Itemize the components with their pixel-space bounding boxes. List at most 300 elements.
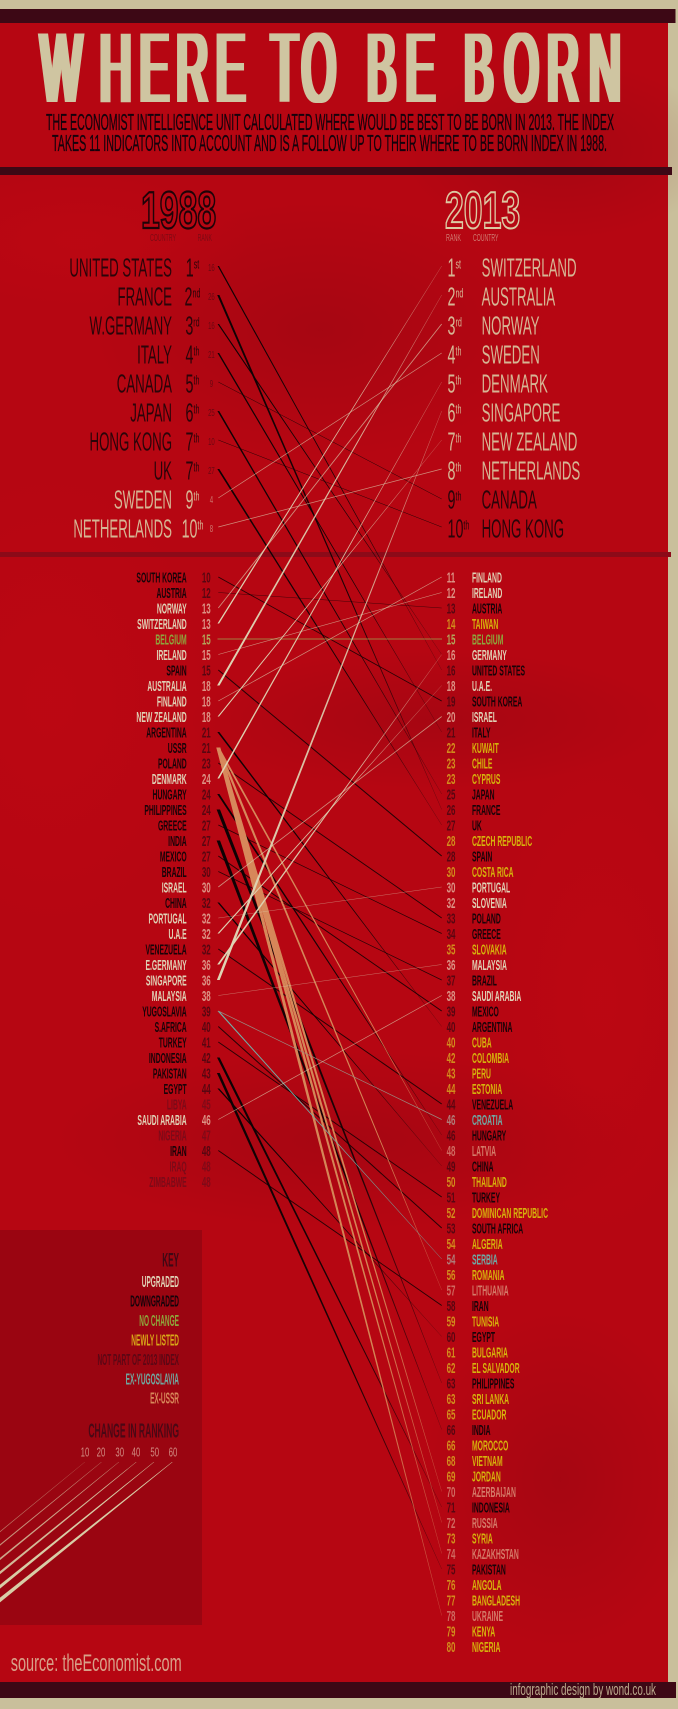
2013 lower list countries: SYRIA xyxy=(472,1532,493,1548)
2013 lower list ranks: 35 xyxy=(447,942,456,958)
2013 lower list ranks: 68 xyxy=(447,1454,456,1470)
2013 lower list countries: COSTA RICA xyxy=(472,866,514,881)
2013 lower list countries: ITALY xyxy=(472,726,491,742)
footer bar xyxy=(0,1680,676,1699)
2013 lower list countries: TUNISIA xyxy=(472,1315,499,1331)
2013 lower list countries: INDONESIA xyxy=(472,1501,510,1517)
1988 lower list ranks xyxy=(202,570,211,1191)
2013 top ten ranks: th xyxy=(455,462,462,475)
2013 lower list countries: AZERBAIJAN xyxy=(472,1486,516,1501)
slope lines: downgraded (black) xyxy=(217,266,442,1569)
1988 lower list countries: U.A.E xyxy=(169,928,187,943)
2013 lower list countries: FRANCE xyxy=(472,804,501,819)
1988 lower list ranks: 42 xyxy=(202,1051,211,1067)
1988 lower list countries: PAKISTAN xyxy=(153,1067,187,1083)
1988 lower list countries: YUGOSLAVIA xyxy=(142,1005,187,1021)
1988 top ten 2013 positions: 9 xyxy=(210,379,213,389)
2013 lower list ranks: 70 xyxy=(447,1485,456,1501)
2013 lower list countries: POLAND xyxy=(472,912,501,928)
1988 top ten countries: ITALY xyxy=(137,341,172,370)
2013 top ten countries: SWEDEN xyxy=(482,341,540,370)
1988 top ten ranks: 9 xyxy=(186,486,193,515)
2013 lower list countries: FINLAND xyxy=(472,571,502,587)
2013 lower list ranks: 21 xyxy=(447,725,456,741)
1988 lower list countries: SAUDI ARABIA xyxy=(137,1114,187,1129)
2013 lower list countries: CUBA xyxy=(472,1036,492,1052)
1988 lower list countries: ISRAEL xyxy=(162,881,187,897)
1988 top ten ranks: 7 xyxy=(186,428,193,457)
2013 top ten countries: SWITZERLAND xyxy=(482,254,577,283)
2013 lower list countries: KAZAKHSTAN xyxy=(472,1548,519,1563)
2013 lower list ranks: 37 xyxy=(447,973,455,989)
2013 lower list countries: SOUTH AFRICA xyxy=(472,1222,523,1238)
2013 lower list ranks: 28 xyxy=(447,834,456,850)
slope lines: upgraded (cream) xyxy=(217,266,442,1120)
2013 top ten countries: NETHERLANDS xyxy=(482,457,580,486)
2013 lower list countries: TURKEY xyxy=(472,1191,500,1207)
2013 lower list countries: LITHUANIA xyxy=(472,1284,509,1300)
1988 lower list ranks: 15 xyxy=(202,663,211,679)
1988 lower list countries: POLAND xyxy=(158,757,187,773)
2013 lower list countries: CZECH REPUBLIC xyxy=(472,835,532,850)
2013 lower list ranks: 11 xyxy=(447,570,456,586)
2013 lower list countries: BANGLADESH xyxy=(472,1594,520,1610)
change scale numbers: 30 xyxy=(115,1446,124,1460)
1988 top ten countries xyxy=(69,254,172,544)
1988 lower list ranks: 30 xyxy=(202,865,211,881)
2013 lower list ranks: 27 xyxy=(447,818,455,834)
2013 lower list ranks: 42 xyxy=(447,1051,456,1067)
2013 lower list ranks: 19 xyxy=(447,694,456,710)
2013 top ten countries: HONG KONG xyxy=(482,515,564,544)
2013 lower list ranks: 53 xyxy=(447,1221,456,1237)
1988 lower list ranks: 46 xyxy=(202,1113,211,1129)
1988 top ten 2013 positions xyxy=(208,263,215,534)
top bar xyxy=(0,9,676,23)
1988 top ten 2013 positions: 25 xyxy=(208,408,215,418)
1988 lower list ranks: 32 xyxy=(202,942,211,958)
2013 top ten countries: SINGAPORE xyxy=(482,399,560,428)
1988 lower list countries: VENEZUELA xyxy=(145,943,187,959)
1988 top ten ranks: th xyxy=(193,491,200,504)
2013 lower list ranks: 33 xyxy=(447,911,456,927)
1988 top ten countries: W.GERMANY xyxy=(90,312,172,341)
key entries: UPGRADED xyxy=(142,1273,179,1291)
change scale numbers: 20 xyxy=(97,1446,105,1460)
1988 top ten ranks: 7 xyxy=(186,457,193,486)
2013 top ten ranks: 3 xyxy=(448,312,455,340)
2013 lower list ranks: 54 xyxy=(447,1252,456,1268)
2013 lower list ranks: 40 xyxy=(447,1035,456,1051)
1988 lower list countries: SOUTH KOREA xyxy=(136,571,187,587)
2013 lower list countries: MALAYSIA xyxy=(472,959,507,974)
2013 lower list countries: SAUDI ARABIA xyxy=(472,990,521,1005)
2013 lower list ranks xyxy=(447,570,456,1656)
1988 lower list ranks: 21 xyxy=(202,725,211,741)
change scale numbers xyxy=(81,1446,177,1460)
2013 lower list countries: GREECE xyxy=(472,928,501,943)
1988 top ten ranks: 4 xyxy=(186,341,193,369)
change in ranking heading: CHANGE IN RANKING xyxy=(88,1421,179,1443)
column labels 1988: RANK xyxy=(198,233,212,244)
2013 lower list countries: SRI LANKA xyxy=(472,1393,509,1408)
2013 top ten ranks: nd xyxy=(455,287,464,301)
2013 top ten ranks: 4 xyxy=(448,341,455,369)
2013 lower list countries: ARGENTINA xyxy=(472,1021,512,1036)
2013 lower list ranks: 36 xyxy=(447,958,456,974)
2013 lower list countries: UKRAINE xyxy=(472,1610,503,1625)
2013 lower list countries: ISRAEL xyxy=(472,711,497,726)
1988 top ten 2013 positions: 21 xyxy=(208,350,215,360)
1988 lower list countries: BRAZIL xyxy=(162,866,187,881)
1988 lower list ranks: 40 xyxy=(202,1020,211,1036)
2013 top ten ranks: 7 xyxy=(448,428,455,457)
2013 lower list ranks: 77 xyxy=(447,1593,455,1609)
2013 lower list ranks: 75 xyxy=(447,1562,456,1578)
1988 lower list countries: E.GERMANY xyxy=(145,959,187,974)
key entries xyxy=(97,1273,179,1407)
1988 top ten ranks: 10 xyxy=(182,515,197,544)
1988 top ten 2013 positions: 8 xyxy=(210,524,213,534)
1988 lower list countries: INDIA xyxy=(168,835,187,850)
2013 lower list countries: LATVIA xyxy=(472,1145,496,1160)
2013 lower list ranks: 16 xyxy=(447,663,456,679)
1988 top ten ranks: 2 xyxy=(185,283,192,311)
key entries: EX-USSR xyxy=(150,1389,179,1407)
1988 top ten 2013 positions: 16 xyxy=(208,321,215,331)
1988 lower list ranks: 48 xyxy=(202,1144,211,1160)
2013 lower list countries: EL SALVADOR xyxy=(472,1362,520,1377)
1988 lower list countries: INDONESIA xyxy=(149,1052,187,1067)
column labels 2013: RANK xyxy=(446,233,461,244)
1988 lower list ranks: 18 xyxy=(202,679,211,695)
2013 lower list ranks: 13 xyxy=(447,601,456,617)
1988 lower list countries: LIBYA xyxy=(167,1098,187,1114)
year heading 1988: 1988 xyxy=(141,182,216,240)
2013 lower list ranks: 76 xyxy=(447,1578,456,1594)
key entries: DOWNGRADED xyxy=(130,1292,179,1310)
1988 top ten ranks: th xyxy=(197,520,204,533)
2013 lower list countries: IRELAND xyxy=(472,587,502,602)
2013 lower list countries: PERU xyxy=(472,1067,491,1083)
1988 lower list countries: SINGAPORE xyxy=(146,974,187,990)
2013 top ten ranks: 2 xyxy=(448,283,455,311)
2013 lower list ranks: 15 xyxy=(447,632,456,648)
2013 lower list ranks: 65 xyxy=(447,1407,456,1423)
1988 top ten 2013 positions: 16 xyxy=(208,263,215,273)
1988 lower list ranks: 13 xyxy=(202,601,211,617)
2013 lower list countries: COLOMBIA xyxy=(472,1052,509,1067)
1988 lower list ranks: 47 xyxy=(202,1128,211,1144)
2013 lower list countries: DOMINICAN REPUBLIC xyxy=(472,1207,548,1222)
1988 lower list countries xyxy=(136,571,187,1191)
year heading 2013: 2013 xyxy=(445,182,520,240)
1988 lower list countries: PORTUGAL xyxy=(149,912,187,928)
1988 lower list countries: ARGENTINA xyxy=(146,726,187,742)
2013 lower list countries: SERBIA xyxy=(472,1253,498,1269)
2013 lower list countries: CHINA xyxy=(472,1160,494,1176)
2013 lower list ranks: 78 xyxy=(447,1609,456,1625)
1988 lower list countries: AUSTRIA xyxy=(156,587,187,602)
2013 lower list ranks: 66 xyxy=(447,1423,456,1439)
1988 top ten ranks: 5 xyxy=(186,370,193,398)
1988 lower list ranks: 43 xyxy=(202,1066,211,1082)
2013 lower list ranks: 46 xyxy=(447,1113,456,1129)
2013 lower list ranks: 32 xyxy=(447,896,456,912)
slope lines: ex-USSR (orange) xyxy=(216,748,442,1616)
1988 lower list ranks: 21 xyxy=(202,741,211,757)
1988 lower list countries: S.AFRICA xyxy=(155,1021,187,1036)
1988 lower list countries: SPAIN xyxy=(166,664,187,680)
2013 lower list ranks: 73 xyxy=(447,1531,456,1547)
1988 lower list ranks: 44 xyxy=(202,1082,211,1098)
1988 lower list countries: MEXICO xyxy=(160,850,187,866)
key entries: NOT PART OF 2013 INDEX xyxy=(97,1351,179,1369)
2013 top ten ranks: th xyxy=(455,433,462,446)
1988 top ten ranks xyxy=(182,254,204,544)
1988 lower list ranks: 10 xyxy=(202,570,211,586)
2013 lower list countries: JORDAN xyxy=(472,1470,501,1486)
1988 lower list ranks: 27 xyxy=(202,834,211,850)
1988 lower list ranks: 32 xyxy=(202,896,211,912)
2013 lower list countries: UNITED STATES xyxy=(472,664,525,680)
2013 lower list ranks: 16 xyxy=(447,648,456,664)
key entries: EX-YUGOSLAVIA xyxy=(126,1370,179,1388)
2013 lower list ranks: 43 xyxy=(447,1066,456,1082)
2013 lower list ranks: 39 xyxy=(447,1004,456,1020)
2013 top ten ranks: 9 xyxy=(448,486,455,515)
column labels 2013: COUNTRY xyxy=(473,233,499,244)
1988 lower list ranks: 13 xyxy=(202,617,211,633)
2013 lower list countries: CHILE xyxy=(472,757,493,773)
1988 top ten ranks: 6 xyxy=(186,399,193,427)
2013 lower list ranks: 46 xyxy=(447,1128,456,1144)
change scale numbers: 40 xyxy=(132,1446,140,1460)
title: WHERE TO BE BORN xyxy=(41,14,621,124)
1988 lower list countries: USSR xyxy=(168,742,187,757)
2013 top ten ranks: 1 xyxy=(448,254,455,282)
1988 lower list ranks: 48 xyxy=(202,1175,211,1191)
2013 top ten ranks xyxy=(448,254,469,544)
1988 lower list countries: HUNGARY xyxy=(153,788,187,804)
2013 lower list countries: VENEZUELA xyxy=(472,1098,513,1114)
2013 top ten ranks: 8 xyxy=(448,457,455,486)
1988 lower list ranks: 15 xyxy=(202,632,211,648)
2013 lower list ranks: 63 xyxy=(447,1376,456,1392)
1988 lower list countries: EGYPT xyxy=(164,1083,187,1098)
2013 top ten countries xyxy=(482,254,580,544)
slope line: no change (green) xyxy=(218,638,442,640)
1988 top ten 2013 positions: 26 xyxy=(208,292,215,302)
2013 lower list countries: PORTUGAL xyxy=(472,881,510,897)
1988 top ten countries: SWEDEN xyxy=(114,486,172,515)
1988 lower list countries: MALAYSIA xyxy=(152,990,187,1005)
2013 lower list ranks: 18 xyxy=(447,679,456,695)
key entries: NO CHANGE xyxy=(139,1312,179,1330)
intro text xyxy=(46,109,614,156)
2013 lower list ranks: 12 xyxy=(447,586,456,602)
1988 top ten countries: NETHERLANDS xyxy=(73,515,172,544)
2013 lower list countries: IRAN xyxy=(472,1300,489,1315)
2013 lower list ranks: 74 xyxy=(447,1547,456,1563)
2013 top ten ranks: 10 xyxy=(448,515,463,544)
1988 lower list countries: GREECE xyxy=(158,819,187,835)
1988 top ten ranks: th xyxy=(193,374,200,388)
change scale numbers: 10 xyxy=(81,1446,89,1460)
2013 top ten countries: NORWAY xyxy=(482,312,540,341)
1988 lower list ranks: 12 xyxy=(202,586,211,602)
1988 lower list ranks: 30 xyxy=(202,880,211,896)
2013 lower list ranks: 79 xyxy=(447,1624,456,1640)
2013 top ten ranks: th xyxy=(463,520,469,533)
2013 top ten countries: CANADA xyxy=(482,486,537,515)
2013 lower list countries: JAPAN xyxy=(472,788,495,804)
2013 lower list countries: KENYA xyxy=(472,1625,495,1641)
2013 lower list countries: ECUADOR xyxy=(472,1408,506,1424)
column labels 2013 xyxy=(446,233,499,244)
1988 lower list ranks: 38 xyxy=(202,989,211,1005)
2013 top ten ranks: th xyxy=(455,345,462,359)
2013 lower list countries: CYPRUS xyxy=(472,773,501,788)
2013 lower list ranks: 38 xyxy=(447,989,456,1005)
1988 lower list ranks: 24 xyxy=(202,787,211,803)
2013 lower list ranks: 49 xyxy=(447,1159,456,1175)
1988 lower list ranks: 27 xyxy=(202,849,211,865)
change scale numbers: 60 xyxy=(169,1446,177,1460)
2013 lower list countries: INDIA xyxy=(472,1424,491,1439)
2013 lower list ranks: 71 xyxy=(447,1500,456,1516)
1988 lower list ranks: 24 xyxy=(202,803,211,819)
2013 lower list countries: PAKISTAN xyxy=(472,1563,506,1579)
1988 top ten ranks: th xyxy=(193,403,200,417)
2013 lower list countries: SLOVAKIA xyxy=(472,943,507,959)
1988 lower list countries: BELGIUM xyxy=(155,633,187,649)
2013 lower list ranks: 59 xyxy=(447,1314,456,1330)
2013 lower list ranks: 57 xyxy=(447,1283,455,1299)
2013 lower list ranks: 54 xyxy=(447,1237,456,1253)
2013 lower list ranks: 34 xyxy=(447,927,456,943)
2013 lower list countries: BELGIUM xyxy=(472,633,503,649)
2013 lower list ranks: 62 xyxy=(447,1361,456,1377)
2013 lower list countries: NIGERIA xyxy=(472,1641,500,1656)
1988 lower list countries: FINLAND xyxy=(157,695,187,711)
1988 lower list ranks: 32 xyxy=(202,927,211,943)
2013 top ten ranks: st xyxy=(455,258,461,272)
2013 lower list ranks: 63 xyxy=(447,1392,456,1408)
1988 top ten 2013 positions: 27 xyxy=(208,466,215,476)
2013 lower list countries: U.A.E. xyxy=(472,680,492,695)
2013 lower list countries: VIETNAM xyxy=(472,1455,503,1470)
1988 top ten countries: FRANCE xyxy=(118,283,172,312)
1988 top ten ranks: 1 xyxy=(186,254,194,282)
2013 top ten ranks: 6 xyxy=(448,399,455,427)
2013 lower list ranks: 25 xyxy=(447,787,456,803)
1988 lower list ranks: 24 xyxy=(202,772,211,788)
1988 lower list countries: NEW ZEALAND xyxy=(136,711,187,726)
2013 lower list countries: ANGOLA xyxy=(472,1579,501,1594)
1988 top ten ranks: th xyxy=(193,462,200,475)
2013 lower list ranks: 58 xyxy=(447,1299,456,1315)
2013 lower list ranks: 69 xyxy=(447,1469,456,1485)
2013 top ten ranks: th xyxy=(455,491,462,504)
2013 lower list countries: EGYPT xyxy=(472,1331,495,1346)
2013 top ten countries: NEW ZEALAND xyxy=(482,428,577,457)
1988 lower list countries: IRELAND xyxy=(156,649,187,664)
key heading: KEY xyxy=(162,1251,179,1272)
2013 lower list ranks: 30 xyxy=(447,880,456,896)
2013 lower list ranks: 72 xyxy=(447,1516,456,1532)
1988 lower list ranks: 39 xyxy=(202,1004,211,1020)
2013 lower list ranks: 14 xyxy=(447,617,456,633)
2013 lower list ranks: 23 xyxy=(447,756,456,772)
1988 lower list countries: AUSTRALIA xyxy=(147,680,187,695)
2013 lower list ranks: 30 xyxy=(447,865,456,881)
2013 lower list countries: BULGARIA xyxy=(472,1346,508,1362)
1988 top ten 2013 positions: 10 xyxy=(208,437,215,447)
1988 top ten ranks: 3 xyxy=(185,312,193,340)
1988 lower list ranks: 45 xyxy=(202,1097,211,1113)
1988 lower list ranks: 41 xyxy=(202,1035,211,1051)
2013 lower list ranks: 22 xyxy=(447,741,456,757)
2013 top ten countries: AUSTRALIA xyxy=(482,283,555,312)
1988 lower list ranks: 18 xyxy=(202,710,211,726)
2013 top ten ranks: th xyxy=(455,403,462,417)
2013 lower list ranks: 56 xyxy=(447,1268,456,1284)
2013 lower list countries: SPAIN xyxy=(472,850,492,866)
1988 lower list ranks: 15 xyxy=(202,648,211,664)
2013 lower list countries: AUSTRIA xyxy=(472,602,502,618)
slope lines: ex-Yugoslavia (teal) xyxy=(218,1011,442,1259)
2013 lower list countries: GERMANY xyxy=(472,649,507,664)
2013 lower list ranks: 50 xyxy=(447,1175,456,1191)
2013 lower list countries: KUWAIT xyxy=(472,742,499,757)
1988 lower list ranks: 48 xyxy=(202,1159,211,1175)
1988 lower list ranks: 18 xyxy=(202,694,211,710)
1988 top ten countries: UK xyxy=(154,457,172,486)
1988 lower list ranks: 32 xyxy=(202,911,211,927)
1988 top ten ranks: th xyxy=(193,433,200,446)
2013 lower list ranks: 44 xyxy=(447,1097,456,1113)
2013 lower list ranks: 61 xyxy=(447,1345,456,1361)
1988 lower list countries: IRAQ xyxy=(170,1160,187,1176)
1988 lower list countries: IRAN xyxy=(170,1145,187,1160)
2013 top ten ranks: 5 xyxy=(448,370,455,398)
2013 top ten countries: DENMARK xyxy=(482,370,548,399)
2013 lower list countries: ESTONIA xyxy=(472,1083,502,1098)
1988 lower list countries: CHINA xyxy=(165,897,187,912)
change scale numbers: 50 xyxy=(150,1446,159,1460)
1988 top ten ranks: st xyxy=(194,258,199,272)
1988 lower list countries: PHILIPPINES xyxy=(144,804,187,819)
2013 lower list ranks: 52 xyxy=(447,1206,456,1222)
2013 lower list ranks: 48 xyxy=(447,1144,456,1160)
2013 lower list countries: ROMANIA xyxy=(472,1269,505,1284)
2013 lower list ranks: 51 xyxy=(447,1190,456,1206)
panel: key xyxy=(0,1230,202,1625)
key entries: NEWLY LISTED xyxy=(131,1331,179,1349)
change scale tapered lines xyxy=(0,1462,173,1602)
2013 lower list ranks: 20 xyxy=(447,710,456,726)
2013 lower list ranks: 28 xyxy=(447,849,456,865)
header divider bar xyxy=(0,167,672,175)
2013 lower list ranks: 44 xyxy=(447,1082,456,1098)
2013 top ten ranks: th xyxy=(455,374,462,388)
2013 lower list countries xyxy=(472,571,548,1656)
1988 lower list ranks: 36 xyxy=(202,958,211,974)
2013 lower list ranks: 40 xyxy=(447,1020,456,1036)
1988 lower list countries: ZIMBABWE xyxy=(149,1176,187,1191)
1988 top ten countries: CANADA xyxy=(117,370,172,399)
